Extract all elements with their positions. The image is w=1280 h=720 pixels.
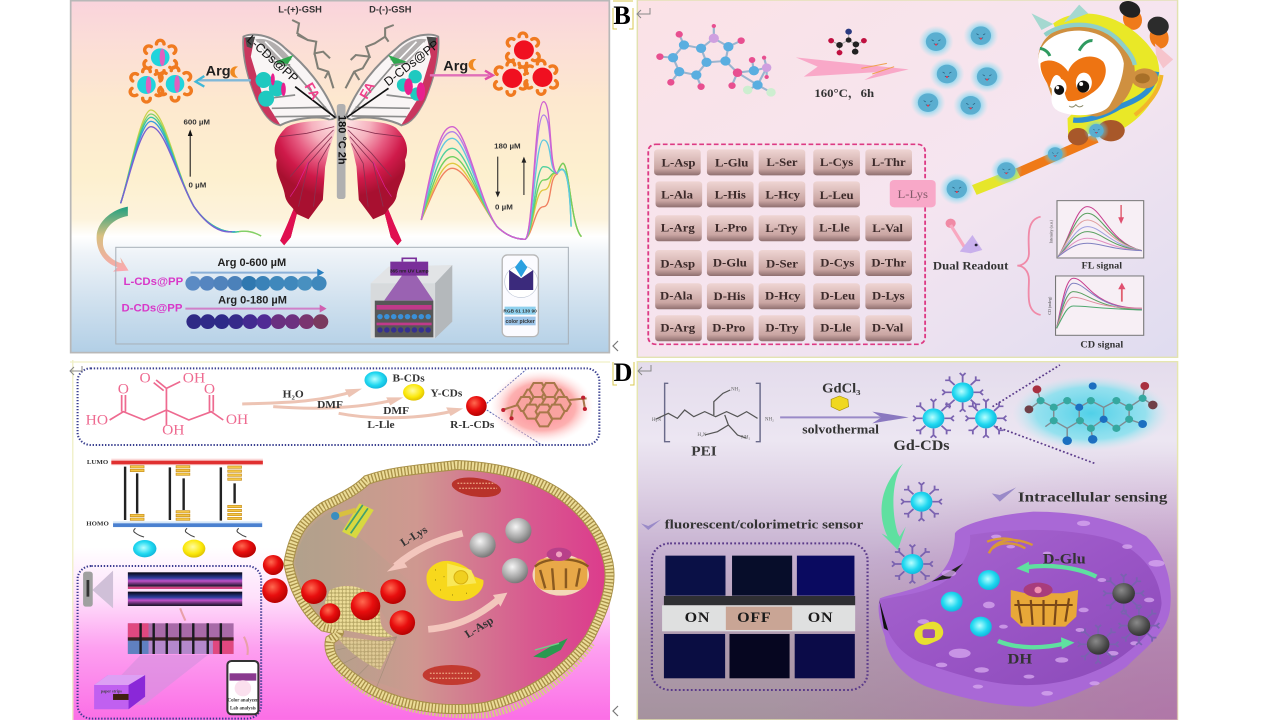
sensor images box: ON <box>808 610 833 626</box>
synthesis arrow and condition <box>796 57 909 100</box>
blue carbon dots <box>911 20 1005 121</box>
synthesis dotted box: B-CDs <box>392 372 425 384</box>
dashed amino acid panel: D-Thr <box>871 256 907 270</box>
synthesis dotted box: H₂O <box>283 388 304 400</box>
energy level diagram <box>86 459 263 558</box>
dashed amino acid panel: L-Glu <box>715 156 749 170</box>
right spectra chart: 180 µM <box>494 142 521 151</box>
butterfly <box>243 32 442 245</box>
energy level diagram: LUMO <box>87 459 108 466</box>
citric acid structure: HO <box>86 412 108 429</box>
intracellular heading: Intracellular sensing <box>1018 491 1167 505</box>
D panel letter: D <box>614 358 632 387</box>
PEI structure <box>652 383 774 459</box>
dashed amino acid panel: D-Lle <box>820 321 852 334</box>
synthesis dotted box: L-Lle <box>367 419 395 431</box>
gray balls <box>470 518 531 583</box>
smartphone colour picker <box>502 255 538 337</box>
free Gd-CDs <box>892 482 942 583</box>
dashed amino acid panel: L-Val <box>872 221 904 235</box>
CD signal chart: CD signal <box>1080 340 1123 350</box>
molecule precursor <box>656 24 776 97</box>
pink brace <box>1017 217 1041 315</box>
right spectra chart: 0 µM <box>495 202 513 211</box>
UV lamp box: 365 nm UV Lamp <box>390 269 429 275</box>
UV lamp box <box>371 258 452 338</box>
red carbon dots <box>262 555 415 635</box>
sensing platform dotted box: paper strips <box>101 689 122 694</box>
golgi nucleus <box>533 548 589 596</box>
dashed amino acid panel: D-Try <box>765 321 798 334</box>
dashed amino acid panel: L-Arg <box>661 221 695 234</box>
CD signal chart: CD (mdeg) <box>1047 296 1052 315</box>
reaction arrow and reagent: GdCl₃ <box>822 382 861 396</box>
dashed amino acid panel: D-Val <box>872 321 904 334</box>
dashed amino acid panel: D-Asp <box>660 257 695 270</box>
sensor images box <box>652 543 868 690</box>
carbon dot structure <box>490 370 593 443</box>
L-CDs ball row: L-CDs@PP <box>124 276 184 288</box>
PEI structure: H₂N <box>652 418 662 423</box>
dashed amino acid panel: L-Hcy <box>765 188 800 201</box>
dashed amino acid panel: D-Lys <box>872 289 905 302</box>
L-CDs ball row <box>124 257 327 291</box>
large cell <box>262 465 610 715</box>
synthesis dotted box <box>78 368 599 445</box>
dashed amino acid panel: D-Cys <box>820 256 855 270</box>
DH arrow: DH <box>1008 651 1032 667</box>
C panel return mark <box>70 366 82 375</box>
GSH molecule labels: D-(-)-GSH <box>369 5 411 15</box>
butterfly: FA <box>356 79 378 101</box>
dashed amino acid panel: L-His <box>715 188 746 201</box>
panel C: citric acid CDs in cell <box>70 360 610 720</box>
citric acid structure: O <box>118 381 129 397</box>
green uptake arrow <box>881 463 906 550</box>
panel B: monkey carbon dots amino acid recognition <box>637 0 1178 357</box>
synthesis arrows <box>242 389 463 418</box>
dashed amino acid panel: D-Ser <box>766 257 798 270</box>
curved arrow from spectra to strip row <box>97 207 129 272</box>
synthesis dotted box: DMF <box>383 405 409 417</box>
D-Glu arrow <box>1016 551 1096 577</box>
butterfly: L-CDs@PP <box>244 32 301 86</box>
GSH molecule structures <box>292 20 394 88</box>
dashed amino acid panel: D-Glu <box>713 256 747 270</box>
droplets <box>917 521 1164 696</box>
dashed amino acid panel: D-Pro <box>712 321 745 334</box>
golgi fibres <box>987 538 1033 553</box>
PEI structure: NH₂ <box>765 418 774 423</box>
dashed amino acid panel: D-Arg <box>660 321 695 334</box>
synthesis arrow and condition: 160°C，6h <box>814 86 874 100</box>
D panel letter <box>612 358 651 387</box>
dashed amino acid panel: L-Pro <box>715 221 747 234</box>
left CDs cluster <box>130 40 191 102</box>
reaction arrow and reagent <box>780 382 909 436</box>
GSH molecule labels: L-(+)-GSH <box>278 5 322 15</box>
monkey cartoon with staff <box>939 0 1173 205</box>
dashed amino acid panel: L-Cys <box>820 155 853 169</box>
panel A: butterfly chiral carbon dots sensing Arg <box>71 1 609 353</box>
synthesis dotted box: R-L-CDs <box>450 419 495 431</box>
bottom inset: test strips and smartphone <box>116 247 568 344</box>
panel D: Gd-CDs sensor and cell <box>637 362 1178 720</box>
Gd-CDs cluster: Gd-CDs <box>893 438 950 454</box>
L-Asp arrow: L-Asp <box>463 615 496 641</box>
left spectra chart: 600 µM <box>183 117 210 126</box>
smartphone colour picker: RGB 61 130 90 <box>503 309 537 315</box>
butterfly: FA <box>302 80 323 103</box>
citric acid structure: O <box>204 381 215 397</box>
molecule with cyan glow <box>1013 376 1169 451</box>
dashed amino acid panel: L-Ser <box>766 155 798 169</box>
citric acid structure: O <box>139 370 151 387</box>
dashed amino acid panel: L-Lle <box>819 221 850 234</box>
citric acid structure: OH <box>226 411 248 428</box>
nucleus <box>426 561 483 601</box>
FL signal chart: FL signal <box>1082 261 1122 272</box>
FL signal chart <box>1048 201 1144 272</box>
PEI structure: H₂N <box>697 433 707 438</box>
reaction arrow and reagent: solvothermal <box>802 422 879 436</box>
wing beads <box>255 70 425 107</box>
dashed amino acid panel: L-Thr <box>872 155 906 169</box>
citric acid structure <box>86 370 248 439</box>
D-Glu arrow: D-Glu <box>1043 551 1086 567</box>
cell membrane and cytoplasm <box>288 465 610 715</box>
Arg arrow left <box>196 64 251 87</box>
synthesis dotted box: Y-CDs <box>431 388 463 400</box>
dashed amino acid panel: D-His <box>714 289 746 303</box>
PEI structure: NH₂ <box>731 388 740 393</box>
L-Lys arrow: L-Lys <box>399 524 430 549</box>
small reagent molecule <box>828 29 867 55</box>
sensor heading: fluorescent/colorimetric sensor <box>665 517 863 531</box>
dashed amino acid panel: L-Asp <box>661 156 696 170</box>
intracellular heading <box>992 487 1167 505</box>
L-CDs ball row: Arg 0-600 µM <box>217 257 286 269</box>
FL signal chart: Intensity (a.u.) <box>1048 219 1054 243</box>
pink arrow and fish <box>946 219 982 253</box>
mitochondrion yellow <box>911 619 947 648</box>
Arg arrow right: Arg <box>443 59 468 75</box>
sensing platform dotted box <box>78 566 261 719</box>
cyan dots in cell <box>941 570 1000 637</box>
dashed amino acid panel: D-Ala <box>660 289 693 302</box>
B panel letter <box>612 1 650 30</box>
L-Asp arrow <box>428 593 507 641</box>
right CDs cluster <box>495 33 557 95</box>
right spectra chart <box>421 102 581 239</box>
dashed amino acid panel: D-Leu <box>820 289 855 302</box>
GSH molecule labels <box>278 5 411 15</box>
organelles <box>331 503 568 658</box>
left chevrons <box>613 341 618 716</box>
Gd-CDs cluster <box>893 365 1095 463</box>
butterfly: D-CDs@PP <box>381 37 442 89</box>
dashed amino acid panel: L-Ala <box>661 188 693 201</box>
sensing platform dotted box: Color analyzer <box>228 698 258 703</box>
dark balls <box>1078 574 1159 664</box>
dashed amino acid panel: D-Hcy <box>765 289 800 302</box>
sensor images box: ON <box>685 610 710 626</box>
highlighted L-Lys tag: L-Lys <box>898 187 928 201</box>
CD signal chart <box>1047 276 1144 350</box>
Arg arrow left: Arg <box>206 64 231 79</box>
energy level diagram: HOMO <box>86 521 109 528</box>
butterfly: 180 °C 2h <box>335 115 347 165</box>
D-CDs ball row: Arg 0-180 µM <box>218 294 287 306</box>
DH arrow <box>998 637 1074 667</box>
smartphone colour picker: color picker <box>505 319 535 325</box>
B panel letter: B <box>613 1 631 30</box>
PEI structure: NH₂ <box>741 436 751 441</box>
D-CDs ball row: D-CDs@PP <box>122 302 183 314</box>
sensor images box: OFF <box>737 610 771 626</box>
highlighted L-Lys tag <box>890 180 936 207</box>
synthesis dotted box: DMF <box>317 399 343 411</box>
sensing platform dotted box: Lab analysis <box>230 706 256 711</box>
dashed amino acid panel: L-Leu <box>820 188 854 202</box>
dual readout label: Dual Readout <box>933 259 1009 272</box>
dashed amino acid panel <box>648 144 925 344</box>
central organelle <box>1011 583 1078 627</box>
left spectra chart <box>121 110 261 236</box>
dashed amino acid panel: L-Try <box>765 221 798 235</box>
left spectra chart: 0 µM <box>189 181 206 190</box>
L-Lys arrow <box>387 524 463 572</box>
Arg arrow right <box>430 59 493 79</box>
mitochondria <box>423 475 502 685</box>
citric acid structure: OH <box>183 370 205 387</box>
citric acid structure: OH <box>162 422 185 439</box>
D-CDs ball row <box>122 294 328 329</box>
PEI structure: PEI <box>691 444 717 459</box>
purple cell <box>879 512 1171 707</box>
